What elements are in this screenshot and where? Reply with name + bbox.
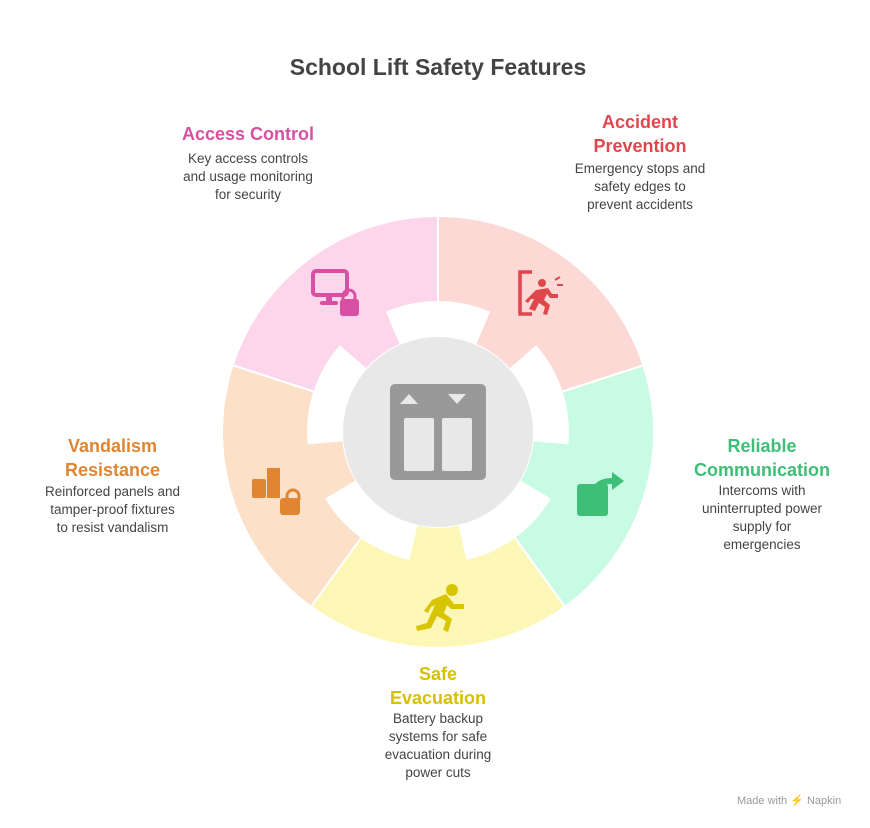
text: reliable communication: supply for [733, 519, 791, 534]
icon: share box [577, 472, 624, 516]
segment: access control [208, 183, 486, 432]
text: access control [182, 124, 314, 202]
text: safe evacuation [385, 664, 491, 780]
icon: buildings with lock [252, 468, 300, 515]
text: reliable communication: uninterrupted power [702, 501, 822, 516]
text: safe evacuation: Evacuation [390, 688, 486, 708]
center circle with elevator icon [343, 337, 533, 527]
segment: reliable communication [487, 340, 683, 619]
text: reliable communication: Reliable [727, 436, 797, 456]
text: accident prevention: Prevention [593, 136, 687, 156]
text: accident prevention [575, 112, 705, 212]
text: vandalism resistance: Reinforced panels and [45, 484, 180, 499]
text: accident prevention: Accident [602, 112, 678, 132]
text: access control: for security [215, 187, 281, 202]
icon: emergency exit runner [520, 272, 563, 315]
text: reliable communication: Communication [694, 460, 830, 480]
icon: runner [416, 584, 464, 632]
text: access control: Key access controls [188, 151, 308, 166]
segment: accident prevention [390, 183, 668, 432]
text: safe evacuation: systems for safe [389, 729, 487, 744]
text: reliable communication [694, 436, 830, 552]
text: accident prevention: prevent accidents [587, 197, 693, 212]
text: safe evacuation: evacuation during [385, 747, 491, 762]
text: vandalism resistance: Resistance [65, 460, 160, 480]
text: vandalism resistance: to resist vandalism [57, 520, 168, 535]
text: access control: and usage monitoring [183, 169, 313, 184]
segment: safe evacuation [311, 525, 565, 648]
text: accident prevention: Emergency stops and [575, 161, 705, 176]
segment: vandalism resistance [193, 340, 389, 619]
text: safe evacuation: Safe [419, 664, 457, 684]
text: accident prevention: safety edges to [594, 179, 686, 194]
text: reliable communication: Intercoms with [718, 483, 806, 498]
text: vandalism resistance: tamper-proof fixtures [50, 502, 175, 517]
text: vandalism resistance [45, 436, 180, 535]
footer credit: Made with ⚡ Napkin [737, 795, 841, 807]
text: safe evacuation: Battery backup [393, 711, 483, 726]
text: access control: Access Control [182, 124, 314, 144]
title: School Lift Safety Features [290, 54, 586, 80]
text: safe evacuation: power cuts [405, 765, 471, 780]
text: reliable communication: emergencies [723, 537, 801, 552]
icon: monitor with lock [313, 271, 359, 316]
text: vandalism resistance: Vandalism [68, 436, 157, 456]
